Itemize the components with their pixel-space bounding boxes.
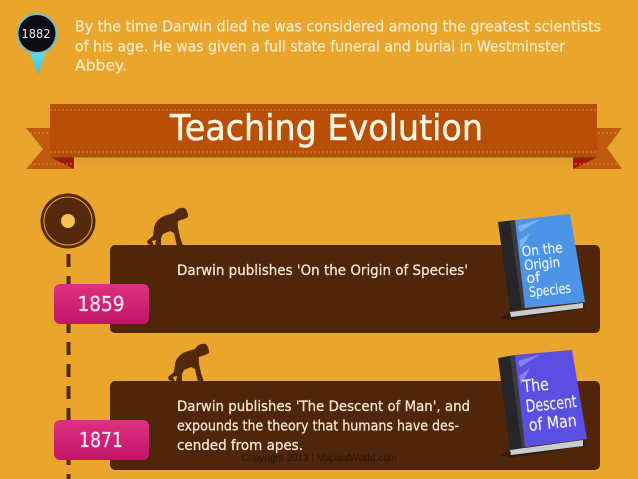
copyright: Copyright 2013 | MapsofWorld.com (241, 453, 397, 464)
text: The Descent of Man: Darwin publishes 'The Descent of Man', and (177, 399, 470, 415)
icon: book On the Origin of Species: Species (528, 281, 572, 301)
text block: Darwin's death (75, 18, 601, 74)
text: On the Origin of Species: Darwin publishes 'On the Origin of Species' (177, 263, 468, 279)
text: The Descent of Man: cended from apes. (177, 438, 303, 454)
badge: 1859 (54, 284, 149, 324)
text: The Descent of Man: expounds the theory that humans have des- (177, 418, 459, 434)
panel: 1859 (110, 245, 600, 333)
icon: timeline start circle (40, 194, 96, 248)
icon: book On the Origin of Species: Origin (523, 255, 561, 274)
icon: ape 1871 (168, 344, 209, 382)
icon: 1882 map pin (18, 14, 56, 75)
icon: book The Descent of Man: The (521, 375, 550, 397)
icon: book The Descent of Man: of Man (528, 411, 578, 436)
icon: book On the Origin of Species (498, 214, 585, 320)
text block: Darwin's death: of his age. He was given a full state funeral and burial in Westminster (75, 38, 566, 56)
badge: 1871 (54, 420, 149, 460)
icon: book On the Origin of Species: On the (521, 240, 563, 260)
icon: book On the Origin of Species: of (526, 270, 542, 287)
text block: Darwin's death: By the time Darwin died he was considered among the greatest scientists (75, 18, 601, 36)
text block: Darwin's death: Abbey. (75, 56, 127, 74)
timeline: dashed line (66, 254, 70, 479)
badge: 1859: 1859 (78, 292, 124, 316)
icon: ape 1859 (147, 208, 188, 246)
icon: book The Descent of Man (498, 350, 587, 458)
icon: book The Descent of Man: Descent (525, 392, 578, 417)
badge: 1871: 1871 (79, 428, 123, 452)
banner: Teaching Evolution: Teaching Evolution (169, 108, 483, 149)
icon: 1882 map pin: 1882 (22, 27, 50, 41)
panel: 1871 (110, 381, 600, 470)
banner: Teaching Evolution (26, 104, 622, 169)
text: The Descent of Man (177, 399, 470, 454)
